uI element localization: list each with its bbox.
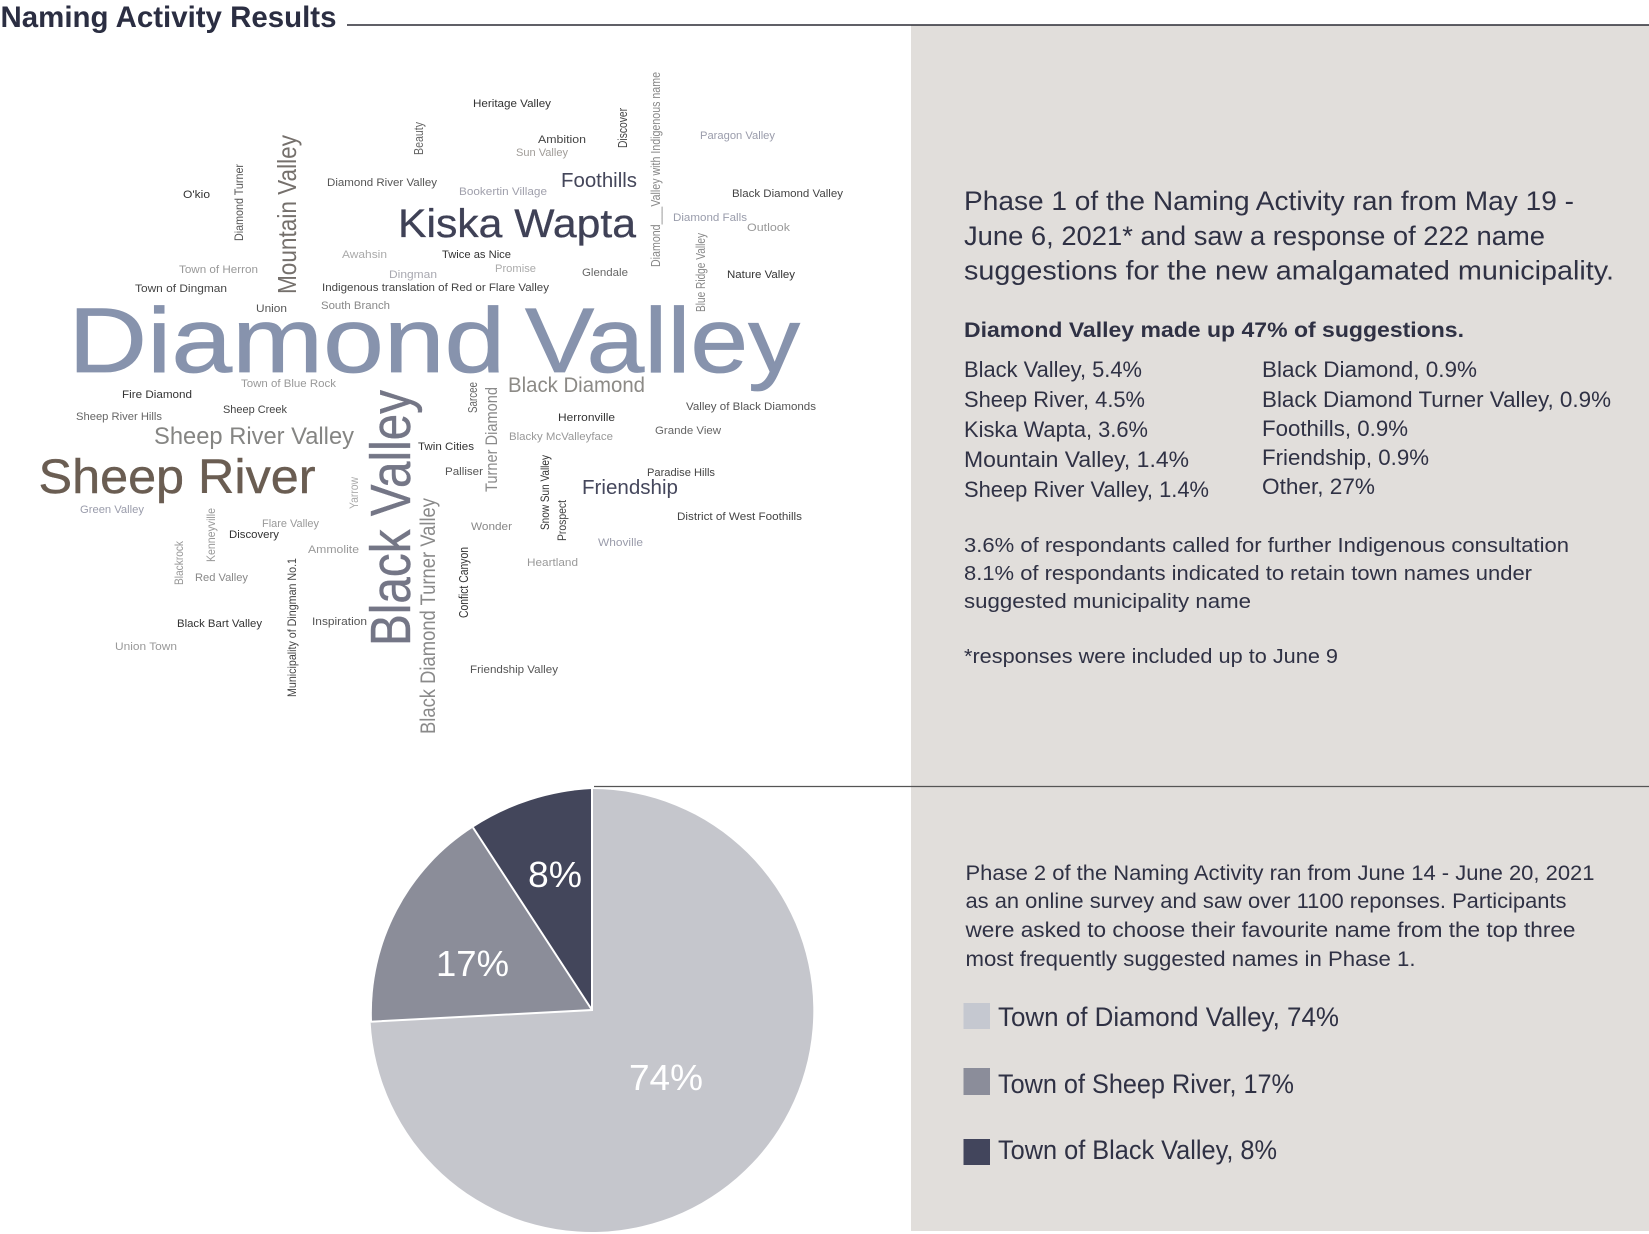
word: Yarrow: Yarrow [347, 477, 361, 509]
list: right column [1262, 357, 1611, 499]
word: Paragon Valley: Paragon Valley [700, 130, 775, 142]
title: Naming Activity Results [0, 1, 336, 34]
word: Diamond Turner: Diamond Turner [232, 164, 246, 241]
word: Nature Valley: Nature Valley [727, 269, 796, 281]
word: Discovery: Discovery [229, 529, 280, 541]
word: Ambition: Ambition [538, 134, 586, 146]
word: Blue Ridge Valley: Blue Ridge Valley [694, 232, 708, 312]
consultation notes: 8.1% of respondants indicated to retain town names under [964, 562, 1532, 585]
list: left column [964, 357, 1209, 502]
legend: Diamond Valley: Town of Diamond Valley, 74% [998, 1002, 1339, 1032]
word: Twin Cities: Twin Cities [418, 441, 475, 453]
word: Sheep River Valley: Sheep River Valley [154, 423, 354, 450]
word: Snow Sun Valley: Snow Sun Valley [538, 455, 552, 530]
word: Town of Herron: Town of Herron [179, 264, 258, 276]
word: Black Bart Valley: Black Bart Valley [177, 618, 263, 630]
word: Friendship: Friendship [582, 477, 678, 499]
consultation notes: 3.6% of respondants called for further Indigenous consultation [964, 534, 1569, 557]
list: left column: Kiska Wapta, 3.6% [964, 417, 1148, 442]
word: Town of Dingman: Town of Dingman [135, 283, 227, 295]
word: Indigenous translation of Red or Flare Valley: Indigenous translation of Red or Flare Valley [322, 282, 550, 294]
word: Beauty: Beauty [412, 121, 426, 155]
list: right column: Other, 27% [1262, 474, 1375, 499]
pie labels: 8% [528, 854, 582, 895]
word: Diamond Valley with Indigenous name: Diamond___Valley with Indigenous name [649, 72, 663, 267]
legend: Sheep River: Town of Sheep River, 17% [998, 1069, 1294, 1099]
bold statement: Diamond Valley made up 47% of suggestions. [964, 318, 1464, 342]
word: Union Town: Union Town [115, 641, 177, 653]
intro paragraph: Phase 1 of the Naming Activity ran from May 19 - [964, 186, 1574, 216]
slice: Black Valley 8% [473, 789, 592, 1010]
word: Kenneyville: Kenneyville [204, 508, 218, 562]
word: Twice as Nice: Twice as Nice [442, 249, 511, 261]
word: Sheep River Hills: Sheep River Hills [76, 411, 162, 423]
word: Red Valley: Red Valley [195, 572, 248, 584]
word: Valley of Black Diamonds: Valley of Black Diamonds [686, 401, 817, 413]
word: Town of Blue Rock: Town of Blue Rock [241, 378, 337, 390]
list: right column: Black Diamond, 0.9% [1262, 357, 1477, 382]
word: Mountain Valley: Mountain Valley [272, 135, 302, 294]
word: Black Diamond Turner Valley: Black Diamond Turner Valley [417, 498, 440, 734]
list: right column: Friendship, 0.9% [1262, 445, 1429, 470]
footnote: *responses were included up to June 9 [964, 645, 1338, 668]
word: Sheep River: Sheep River [38, 451, 316, 504]
word: South Branch: South Branch [321, 300, 390, 312]
word: Green Valley: Green Valley [80, 504, 145, 516]
intro paragraph: suggestions for the new amalgamated municipality. [964, 256, 1614, 286]
word: Black Diamond: Black Diamond [508, 374, 645, 397]
paragraph: as an online survey and saw over 1100 reponses. Participants [966, 890, 1566, 913]
word: Friendship Valley: Friendship Valley [470, 664, 559, 676]
word: Palliser: Palliser [445, 466, 483, 478]
word: Bookertin Village: Bookertin Village [459, 186, 547, 198]
word: Dingman: Dingman [389, 269, 437, 281]
word: O'kio: O'kio [183, 189, 210, 201]
word: Paradise Hills: Paradise Hills [647, 467, 716, 479]
word: Turner Diamond: Turner Diamond [482, 387, 501, 492]
word: Blackrock: Blackrock [172, 540, 186, 585]
paragraph: were asked to choose their favourite name from the top three [964, 919, 1576, 942]
list: left column: Sheep River Valley, 1.4% [964, 477, 1209, 502]
word: Discover: Discover [616, 108, 630, 148]
word: Kiska Wapta: Kiska Wapta [398, 202, 637, 246]
word: Flare Valley: Flare Valley [262, 518, 319, 530]
list: left column: Sheep River, 4.5% [964, 387, 1145, 412]
word: Foothills: Foothills [561, 170, 637, 192]
consultation notes: suggested municipality name [964, 590, 1251, 613]
word: Awahsin: Awahsin [342, 249, 387, 261]
paragraph: Phase 2 of the Naming Activity ran from June 14 - June 20, 2021 [966, 862, 1594, 885]
word: Diamond Valley: Valley [525, 290, 800, 392]
pie labels: 17% [436, 943, 509, 984]
word: Diamond Falls: Diamond Falls [673, 212, 748, 224]
intro paragraph: June 6, 2021* and saw a response of 222 name [964, 221, 1545, 251]
word: Blacky McValleyface: Blacky McValleyface [509, 431, 613, 443]
word: Diamond Valley [68, 290, 800, 392]
word cloud [38, 72, 844, 734]
list: left column: Mountain Valley, 1.4% [964, 447, 1189, 472]
word: Diamond River Valley: Diamond River Valley [327, 177, 438, 189]
word: Confict Canyon: Confict Canyon [457, 547, 471, 618]
panel: grey background [911, 25, 1649, 1231]
panel: Phase 1 text [964, 186, 1614, 668]
word: Wonder: Wonder [471, 521, 512, 533]
slice: Diamond Valley 74% [371, 789, 813, 1232]
word: Promise: Promise [495, 263, 536, 275]
word: Outlook: Outlook [747, 222, 791, 234]
panel: Phase 2 text [964, 862, 1594, 1165]
word: Sarcee: Sarcee [466, 382, 480, 413]
word: Glendale: Glendale [582, 267, 628, 279]
word: Whoville: Whoville [598, 537, 643, 549]
word: District of West Foothills: District of West Foothills [677, 511, 803, 523]
word: Prospect: Prospect [555, 499, 569, 541]
word: Fire Diamond: Fire Diamond [122, 389, 192, 401]
legend: Black Valley: Town of Black Valley, 8% [998, 1135, 1277, 1165]
word: Inspiration: Inspiration [312, 616, 367, 628]
word: Black Diamond Valley: Black Diamond Valley [732, 188, 844, 200]
word: Municipality of Dingman No.1: Municipality of Dingman No.1 [285, 558, 299, 697]
slice: Sheep River 17% [372, 828, 592, 1021]
pie labels [436, 854, 703, 1098]
word: Sun Valley: Sun Valley [516, 147, 568, 159]
pie labels: 74% [629, 1057, 703, 1098]
word: Heartland: Heartland [527, 557, 578, 569]
word: Union: Union [256, 303, 287, 315]
paragraph [964, 862, 1594, 971]
word: Diamond Valley: Diamond [68, 290, 505, 392]
list: left column: Black Valley, 5.4% [964, 357, 1142, 382]
word: Herronville: Herronville [558, 412, 615, 424]
intro paragraph [964, 186, 1614, 286]
word: Black Valley: Black Valley [359, 390, 423, 646]
word: Heritage Valley: Heritage Valley [473, 98, 552, 110]
word: Ammolite: Ammolite [308, 544, 359, 556]
pie chart [371, 789, 813, 1232]
word: Grande View: Grande View [655, 425, 721, 437]
paragraph: most frequently suggested names in Phase 1. [966, 948, 1416, 971]
list: right column: Foothills, 0.9% [1262, 416, 1408, 441]
word: Sheep Creek: Sheep Creek [223, 404, 287, 416]
consultation notes [964, 534, 1569, 613]
list: right column: Black Diamond Turner Valley, 0.9% [1262, 387, 1611, 412]
